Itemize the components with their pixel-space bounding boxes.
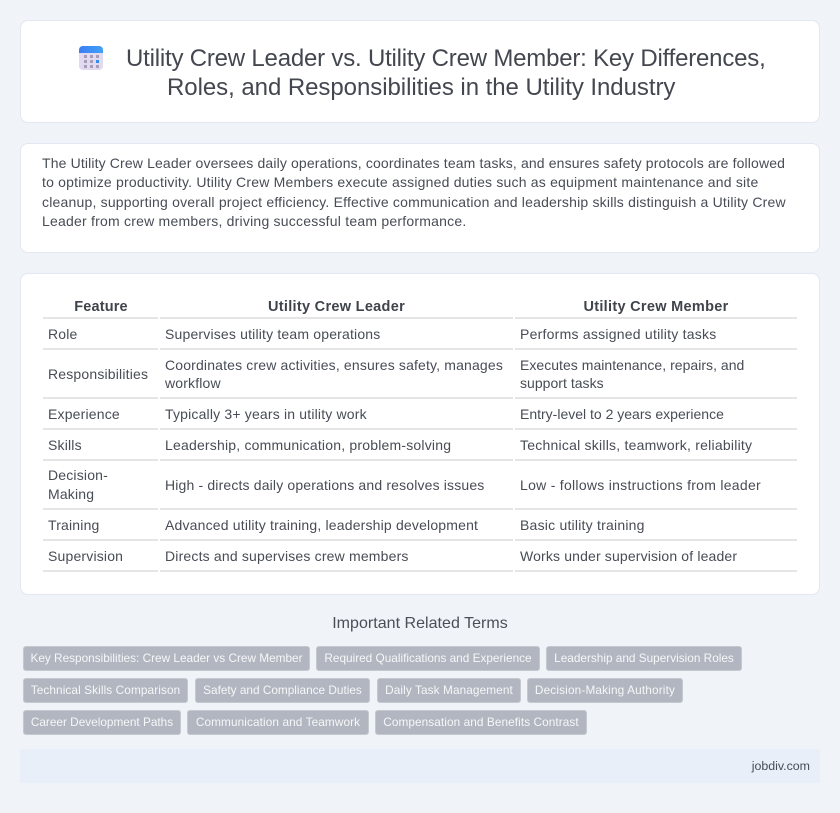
footer source: jobdiv.com	[752, 759, 810, 773]
header card	[20, 20, 820, 123]
comparison table panel: Works under supervision of leader	[520, 548, 737, 564]
intro paragraph: The Utility Crew Leader oversees daily operations, coordinates team tasks, and ensures safety protocols are followed	[42, 154, 785, 170]
footer bar	[20, 749, 820, 783]
comparison table panel: Typically 3+ years in utility work	[165, 406, 367, 422]
row: decision-making: Making	[48, 486, 94, 502]
related term tags: Technical Skills Comparison	[31, 683, 180, 697]
comparison table panel: Low - follows instructions from leader	[520, 477, 761, 493]
comparison table panel	[20, 273, 820, 595]
intro paragraph	[42, 154, 786, 229]
comparison table panel: High - directs daily operations and resolves issues	[165, 477, 484, 493]
row: decision-making	[48, 467, 108, 502]
row: skills: Skills	[48, 437, 82, 453]
row: role: Role	[48, 326, 78, 342]
related term tags: Decision-Making Authority	[535, 683, 675, 697]
table header: Feature	[74, 299, 128, 315]
related term tags: Daily Task Management	[385, 683, 513, 697]
comparison table panel: Advanced utility training, leadership development	[165, 517, 478, 533]
icon: calendar	[79, 46, 103, 70]
comparison table panel: Basic utility training	[520, 517, 645, 533]
comparison table panel: Coordinates crew activities, ensures safety, manages	[165, 357, 503, 373]
comparison table panel: Executes maintenance, repairs, and	[520, 357, 744, 373]
comparison table panel: Utility Crew Member	[583, 299, 729, 315]
comparison table panel: Performs assigned utility tasks	[520, 326, 717, 342]
intro paragraph: to optimize productivity. Utility Crew Members execute assigned duties such as equipment maintenance and site	[42, 174, 758, 190]
related term tags: Required Qualifications and Experience	[324, 651, 532, 665]
related term tags: Communication and Teamwork	[196, 715, 360, 729]
related term tags: Safety and Compliance Duties	[203, 683, 362, 697]
related term tags: Compensation and Benefits Contrast	[383, 715, 579, 729]
row: experience: Experience	[48, 406, 120, 422]
comparison table panel: Leadership, communication, problem-solving	[165, 437, 451, 453]
row: supervision: Supervision	[48, 548, 123, 564]
intro paragraph: cleanup, supporting overall project efficiency. Effective communication and leadership skills distinguish a Utility Crew	[42, 194, 786, 210]
related terms heading: Important Related Terms	[332, 615, 508, 632]
comparison table panel: Supervises utility team operations	[165, 326, 380, 342]
related term tags: Key Responsibilities: Crew Leader vs Crew Member	[30, 651, 303, 665]
row: decision-making: Decision-	[48, 467, 108, 483]
title	[126, 45, 766, 101]
related term tags: Leadership and Supervision Roles	[554, 651, 734, 665]
title: Utility Crew Leader vs. Utility Crew Member: Key Differences,	[126, 45, 766, 72]
comparison table panel: Technical skills, teamwork, reliability	[520, 437, 752, 453]
intro paragraph: Leader from crew members, driving successful team performance.	[42, 213, 466, 229]
comparison table panel: workflow	[165, 375, 221, 391]
intro panel	[20, 143, 820, 253]
comparison table panel: Directs and supervises crew members	[165, 548, 409, 564]
comparison table panel: Entry-level to 2 years experience	[520, 406, 724, 422]
row: responsibilities: Responsibilities	[48, 366, 148, 382]
comparison table panel: Utility Crew Leader	[268, 299, 405, 315]
comparison table panel: support tasks	[520, 375, 604, 391]
related term tags	[23, 646, 742, 735]
related term tags: Career Development Paths	[31, 715, 173, 729]
row: training: Training	[48, 517, 100, 533]
title: Roles, and Responsibilities in the Utility Industry	[167, 74, 675, 101]
